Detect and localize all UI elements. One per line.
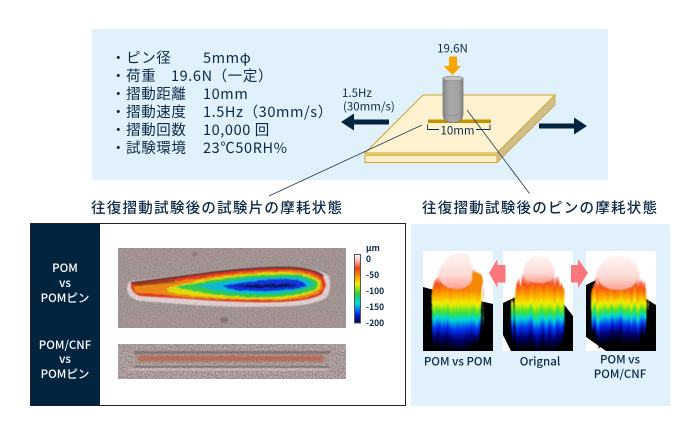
- panel: specimen wear: [30, 224, 406, 406]
- color scale: -150: [366, 301, 384, 313]
- diagram: plate with pin: [365, 40, 555, 162]
- label: speed: [342, 85, 395, 114]
- conditions list: ・摺動距離: [111, 83, 186, 104]
- color scale: 0: [366, 253, 371, 265]
- conditions list: 19.6N（一定）: [171, 65, 273, 86]
- color scale: -100: [366, 285, 384, 297]
- conditions list: [111, 47, 333, 158]
- conditions list: ・荷重: [111, 65, 156, 86]
- panel: test conditions: [92, 29, 608, 180]
- panel: pin wear: [411, 224, 670, 406]
- icon: pin: [443, 76, 463, 122]
- label: original: Orignal: [520, 354, 561, 370]
- heading: specimen wear: 往復摺動試験後の試験片の摩耗状態: [91, 197, 342, 218]
- label: POM vs POM/CNF: [594, 352, 647, 382]
- conditions list: 10mm: [203, 83, 248, 104]
- label: POM vs POM: POM vs POM: [424, 354, 492, 370]
- label: speed: (30mm/s): [343, 98, 395, 114]
- label: POM vs POM/CNF: POM/CNF: [594, 366, 647, 382]
- conditions list: ・試験環境: [111, 137, 186, 158]
- bracket: 10mm: 10mm: [440, 122, 475, 138]
- label: POM vs POM pin: vs: [59, 275, 71, 291]
- conditions list: ・摺動速度: [111, 101, 186, 122]
- pin image: POM vs POM: [423, 251, 493, 351]
- pin image: POM vs POM/CNF: [586, 251, 656, 351]
- label: POM/CNF vs POM pin: vs: [59, 351, 71, 367]
- label: speed: 1.5Hz: [342, 85, 372, 101]
- arrow: load: [444, 56, 461, 75]
- label: POM/CNF vs POM pin: POMピン: [41, 366, 89, 382]
- label: POM vs POM pin: [41, 260, 89, 306]
- label: POM vs POM pin: POM: [52, 260, 78, 276]
- heading: pin wear: 往復摺動試験後のピンの摩耗状態: [422, 197, 657, 218]
- heat map: POM vs POM pin: [118, 248, 346, 328]
- color scale: [354, 242, 384, 329]
- conditions list: 5mmφ: [203, 47, 251, 68]
- arrow: to POM vs POM: [489, 259, 506, 288]
- conditions list: 10,000 回: [203, 119, 270, 140]
- arrow: left motion: [341, 114, 389, 130]
- color scale: -200: [366, 317, 384, 329]
- pin image: original: [503, 251, 573, 351]
- color scale: -50: [366, 269, 379, 281]
- label: POM vs POM pin: POMピン: [41, 290, 89, 306]
- label: load value: 19.6N: [437, 40, 468, 56]
- arrow: to POM vs POM/CNF: [571, 259, 588, 288]
- leader line: pin: [467, 110, 530, 194]
- heat map: POM/CNF vs POM pin: [118, 344, 346, 379]
- label: POM vs POM/CNF: POM vs: [600, 352, 640, 368]
- conditions list: 1.5Hz（30mm/s）: [203, 101, 333, 122]
- label: POM/CNF vs POM pin: POM/CNF: [39, 337, 92, 353]
- leader line: specimen: [269, 125, 422, 196]
- bracket: 10mm: [428, 122, 490, 138]
- color scale: μm: [366, 242, 380, 254]
- conditions list: ・摺動回数: [111, 119, 186, 140]
- conditions list: 23℃50RH%: [203, 137, 288, 158]
- label: POM/CNF vs POM pin: [39, 337, 92, 382]
- wear track: [428, 120, 491, 123]
- arrow: right motion: [539, 118, 587, 134]
- conditions list: ・ピン径: [111, 47, 171, 68]
